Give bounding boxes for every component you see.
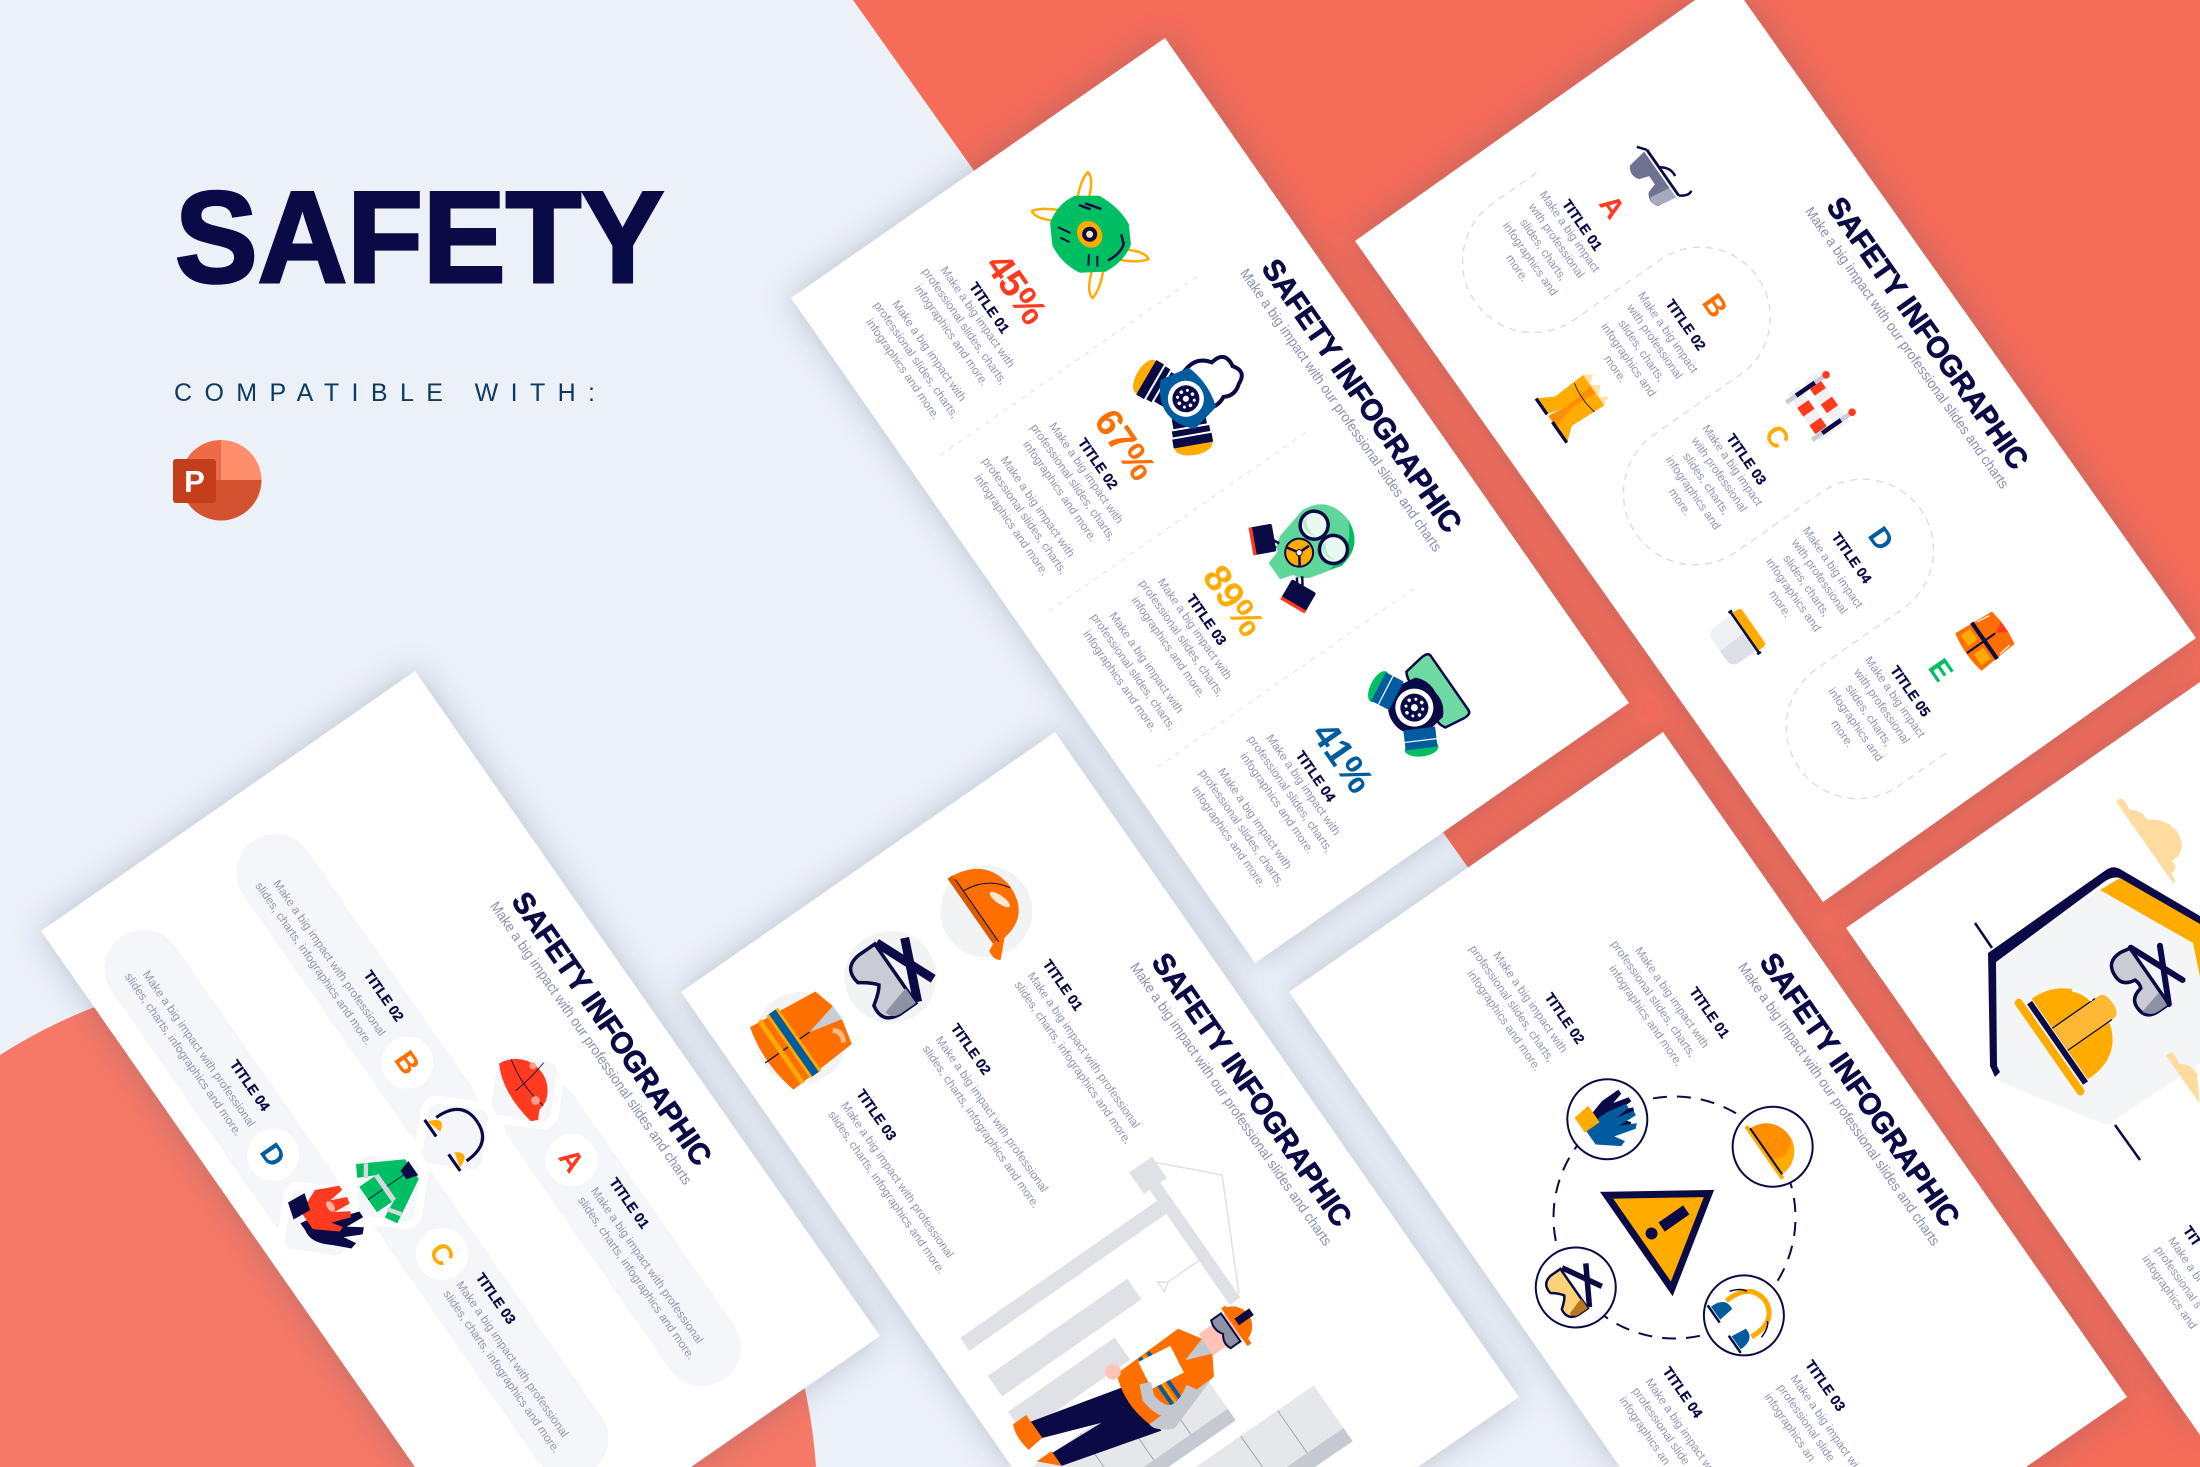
text block: title 01: infographics and more. bbox=[912, 282, 992, 389]
text block: title 01: professional slides, charts, bbox=[871, 299, 962, 421]
illustration: crane and buildings bbox=[935, 1130, 1353, 1467]
text block: title 05: slides, charts, bbox=[1843, 682, 1895, 749]
text block: title 03: slides, charts, infographics and more. bbox=[440, 1287, 564, 1456]
step D badge: D bbox=[253, 1138, 291, 1173]
text block: title 04: TITLE 04 bbox=[227, 1057, 274, 1114]
hexagon roof: amber band bbox=[2100, 878, 2200, 977]
text block: title 02: Make a big impact with bbox=[998, 453, 1078, 560]
compatible with label: COMPATIBLE WITH: bbox=[174, 379, 595, 407]
stat: 41%: 41% bbox=[1303, 715, 1381, 801]
text block: title 03: professional slides, charts, bbox=[1088, 611, 1179, 733]
illustration: construction worker bbox=[1013, 1281, 1281, 1466]
text block: title 01: infographics and more. bbox=[1606, 962, 1686, 1069]
text block: title 03: infographics and more. bbox=[1129, 594, 1209, 700]
text block: title 02: Make a big impact with bbox=[1046, 420, 1126, 526]
text block: title 02: Make a big impact with professional bbox=[270, 877, 389, 1038]
icon: yellow goggles node bbox=[1520, 1232, 1631, 1343]
icon: blue respirator bbox=[1118, 317, 1270, 472]
pill lanes bbox=[89, 819, 756, 1467]
step B badge: B bbox=[387, 1045, 426, 1081]
text block: title 04 bbox=[1616, 1364, 1716, 1467]
icon: safety glasses bbox=[1621, 136, 1692, 214]
text block: title 03: infographics an bbox=[1761, 1390, 1819, 1464]
step C badge: C bbox=[422, 1237, 460, 1272]
letter: D: D bbox=[1861, 521, 1899, 557]
coral background shape: top right bbox=[853, 0, 2200, 1467]
text block: title 02: slides, charts, infographics and more. bbox=[252, 879, 376, 1048]
cloud: lower bbox=[2166, 1047, 2200, 1104]
text block: title 02: professional slides, charts, bbox=[1467, 942, 1557, 1064]
icon: face shield bbox=[1705, 605, 1768, 671]
icon: half-face respirator with visor bbox=[1355, 640, 1480, 772]
text block: title 03: infographics and more. bbox=[1080, 628, 1160, 734]
stat: 89%: 89% bbox=[1194, 558, 1272, 644]
text block: title 01: infographics and bbox=[1500, 219, 1561, 298]
text block: title 01: slides, charts, infographics and more. bbox=[1012, 978, 1135, 1147]
text block: title 03: infographics and bbox=[1663, 453, 1724, 532]
slide subheading: Make a big impact with our professional slides and charts bbox=[1126, 960, 1334, 1249]
slide heading: SAFETY INFOGRAPHIC bbox=[505, 886, 718, 1172]
text block: title 03: Make a big impact with bbox=[1107, 609, 1187, 716]
slide heading: SAFETY INFOGRAPHIC bbox=[1145, 947, 1358, 1233]
icon: orange hard hat in circle bbox=[920, 845, 1051, 977]
hexagon backdrop bbox=[1994, 890, 2200, 1125]
icon: road barrier bbox=[1783, 368, 1859, 445]
text block: title 01: slides, charts, infographics and more. bbox=[575, 1194, 698, 1362]
stat: 67%: 67% bbox=[1085, 402, 1163, 488]
text block: title 02: TITLE 02 bbox=[1075, 435, 1122, 492]
cloud: upper bbox=[2116, 782, 2200, 884]
text block: title 03: professional slides, charts, bbox=[1136, 577, 1227, 699]
text block: title 03: Make a big impact with professional bbox=[838, 1099, 957, 1260]
text block: title 02: more. bbox=[1601, 352, 1630, 385]
dashed serpentine path bbox=[1434, 103, 2043, 827]
text block: partially visible title: infographics and bbox=[2139, 1253, 2200, 1332]
text block: title 05: Make a big impact bbox=[1862, 654, 1929, 741]
icon: work gloves bbox=[284, 1172, 374, 1266]
panel: serpentine steps slide bbox=[1355, 0, 2196, 902]
text block: title 02: professional slides, charts, bbox=[1028, 421, 1119, 543]
text block: title 03: TITLE 03 bbox=[1183, 591, 1230, 648]
icon: red hard hat bbox=[491, 1043, 569, 1125]
icon: green gas mask bbox=[1236, 478, 1378, 620]
text block: title 03: Make a big impact with professional bbox=[454, 1278, 572, 1440]
text block: title 02 bbox=[1582, 278, 1718, 413]
coral background circle: bottom left bbox=[0, 971, 816, 1467]
stat: 45%: 45% bbox=[977, 246, 1055, 333]
text block: title 05: TITLE 05 bbox=[1887, 663, 1934, 720]
text block: title 03 bbox=[1647, 413, 1779, 546]
text block: title 02: professional slides, charts, bbox=[979, 455, 1070, 577]
text block: title 02: infographics and more. bbox=[1464, 967, 1544, 1074]
slide heading: SAFETY INFOGRAPHIC bbox=[1820, 191, 2034, 476]
text block: title 03: TITLE 03 bbox=[1723, 431, 1770, 488]
main title: SAFETY bbox=[175, 164, 664, 310]
text block: title 05 bbox=[1810, 644, 1943, 777]
text block: title 02 bbox=[1453, 922, 1588, 1075]
text block: title 04: infographics and bbox=[1763, 555, 1824, 634]
text block: title 04: professional slides, charts, bbox=[1197, 767, 1287, 889]
icon: blue ear muffs node bbox=[1688, 1260, 1800, 1371]
text block: title 05: with professional bbox=[1851, 665, 1913, 746]
text block: title 01: Make a big impact with bbox=[1632, 944, 1712, 1051]
text block: title 02: TITLE 02 bbox=[361, 967, 407, 1024]
text block: title 04: Make a big impact bbox=[1800, 524, 1866, 611]
letter: A: A bbox=[1592, 189, 1631, 225]
text block: title 01: with professional bbox=[1525, 200, 1588, 281]
icon: amber hard hat bbox=[2019, 959, 2144, 1091]
text block: title 01: infographics and more. bbox=[863, 316, 943, 422]
text block: title 04: slides, charts, infographics and more. bbox=[122, 970, 245, 1138]
icon tiles bbox=[251, 1015, 593, 1299]
icon: green jacket bbox=[347, 1138, 434, 1229]
text block: title 01: Make a big impact with professional bbox=[588, 1185, 706, 1346]
step A badge: A bbox=[552, 1143, 590, 1179]
text block: title 05: infographics and bbox=[1825, 685, 1886, 764]
icon: ear muffs bbox=[425, 1096, 495, 1171]
text block: title 01: professional slides, charts, bbox=[919, 265, 1010, 387]
slide subheading: Make a big impact with our professional slides and charts bbox=[1236, 266, 1444, 555]
text block: title 01: more. bbox=[1503, 252, 1532, 284]
text block: title 02: infographics and more. bbox=[1020, 438, 1100, 544]
text block: title 01: slides, charts, bbox=[1517, 216, 1570, 283]
text block: title 02: with professional bbox=[1624, 301, 1686, 381]
text block: title 02: Make a big impact with bbox=[1491, 949, 1571, 1055]
text block: title 01 bbox=[1484, 179, 1616, 312]
text block: title 03 bbox=[1075, 559, 1254, 742]
text block: title 04: slides, charts, bbox=[1780, 552, 1833, 619]
text block: title 01: Make a big impact with bbox=[938, 264, 1018, 370]
text block: title 01: Make a big impact with bbox=[889, 297, 969, 404]
text block: title 02 bbox=[966, 403, 1145, 586]
text block: title 01: Make a big impact bbox=[1537, 188, 1603, 275]
text block: title 03: professional slide bbox=[1775, 1381, 1838, 1464]
icon: hard hat node bbox=[1717, 1091, 1828, 1202]
text block: title 02: slides, charts, infographics and more. bbox=[920, 1042, 1043, 1211]
panel: hexagon slide (cropped at right edge) bbox=[1846, 682, 2200, 1435]
text block: title 05: more. bbox=[1828, 717, 1857, 750]
text block: title 03: with professional bbox=[1688, 433, 1750, 514]
text block: title 01: TITLE 01 bbox=[1559, 196, 1606, 254]
text block: title 04: TITLE 04 bbox=[1660, 1364, 1706, 1421]
icon: PowerPoint logo: P bbox=[184, 464, 205, 499]
panel: circular cycle slide bbox=[1289, 732, 2127, 1467]
icon: orange vest with pockets bbox=[1953, 608, 2018, 672]
letter: C: C bbox=[1757, 419, 1796, 455]
text block: title 02: Make a big impact with professional bbox=[933, 1033, 1051, 1195]
text block: title 01 bbox=[858, 247, 1036, 430]
text block: title 02: infographics and more. bbox=[972, 472, 1052, 578]
text block: title 03 bbox=[1761, 1357, 1862, 1467]
letter: B: B bbox=[1695, 288, 1734, 324]
text block: title 04: more. bbox=[1766, 587, 1795, 620]
text block: title 01: Make a big impact with professional bbox=[1025, 969, 1143, 1131]
text block: title 02: infographics and bbox=[1598, 320, 1659, 399]
text block: title 02: Make a big impact bbox=[1635, 289, 1702, 376]
text block: title 03: slides, charts, bbox=[1680, 450, 1733, 517]
text block: title 04: infographics and more. bbox=[1237, 750, 1317, 856]
step B badge bbox=[371, 1026, 444, 1099]
icon: goggles in circle bbox=[826, 913, 954, 1041]
icon: green dust mask bbox=[1029, 170, 1152, 300]
text block: title 04: TITLE 04 bbox=[1293, 748, 1339, 805]
text block: title 03: Make a big impact bbox=[1700, 422, 1766, 509]
panel: pill lanes slide bbox=[41, 671, 880, 1467]
text block: title 01: TITLE 01 bbox=[1686, 984, 1733, 1041]
text block: title 03: TITLE 03 bbox=[853, 1086, 900, 1143]
text block: title 04: Make a big impact with bbox=[1215, 765, 1295, 872]
hexagon outline bbox=[1988, 867, 2200, 1077]
text block: title 03: Make a big impact with bbox=[1155, 576, 1235, 682]
dashed cycle ring bbox=[1506, 1049, 1843, 1386]
slide subheading: Make a big impact with our professional slides and charts bbox=[1801, 204, 2011, 492]
text block: title 01: TITLE 01 bbox=[606, 1175, 653, 1232]
icon: warning triangle bbox=[1607, 1147, 1742, 1289]
text block: title 04: Make a big impact with bbox=[1264, 732, 1344, 838]
text block: title 04 bbox=[1183, 715, 1362, 898]
slide subheading: Make a big impact with our professional slides and charts bbox=[486, 899, 694, 1188]
letter: E: E bbox=[1921, 653, 1959, 688]
text block: title 04: infographics an bbox=[1616, 1394, 1674, 1467]
text block: title 03: more. bbox=[1666, 485, 1694, 518]
panel: worker illustration slide bbox=[681, 732, 1519, 1467]
icon: PowerPoint logo bbox=[173, 440, 262, 520]
text block: title 02: TITLE 02 bbox=[948, 1020, 994, 1078]
text block: title 04 bbox=[1747, 511, 1884, 648]
text block: title 01: professional slides, charts, bbox=[1608, 938, 1699, 1060]
icon: gloves node bbox=[1552, 1064, 1663, 1175]
panel: percentage masks slide bbox=[791, 38, 1629, 963]
text block: title 04: professional slide bbox=[1629, 1385, 1693, 1467]
text block: title 01 bbox=[1595, 915, 1733, 1071]
text block: title 01: TITLE 01 bbox=[1040, 956, 1086, 1014]
icon: yellow boots bbox=[1536, 364, 1616, 443]
text block: title 03: TITLE 03 bbox=[1802, 1357, 1849, 1414]
text block: title 04: infographics and more. bbox=[1189, 784, 1269, 890]
text block: title 02: slides, charts, bbox=[1615, 317, 1668, 384]
text block: title 02 bbox=[252, 856, 408, 1048]
text block: title 04: professional slides, charts, bbox=[1245, 733, 1336, 855]
slide heading: SAFETY INFOGRAPHIC bbox=[1255, 253, 1468, 539]
text block: title 04: Make a big impact with professional bbox=[140, 968, 258, 1129]
text block: title 01: TITLE 01 bbox=[966, 279, 1013, 336]
text block: title 04: TITLE 04 bbox=[1829, 529, 1875, 586]
icon: goggles bbox=[2106, 932, 2190, 1020]
text block: title 03: slides, charts, infographics and more. bbox=[825, 1108, 948, 1277]
slide heading: SAFETY INFOGRAPHIC bbox=[1753, 947, 1966, 1233]
slide subheading: Make a big impact with our professional slides and charts bbox=[1734, 960, 1942, 1249]
step A badge bbox=[535, 1124, 608, 1196]
step D badge bbox=[237, 1119, 309, 1191]
text block: title 02: TITLE 02 bbox=[1542, 990, 1588, 1047]
text block: title 04: with professional bbox=[1788, 535, 1851, 616]
step C badge bbox=[406, 1218, 478, 1290]
icon: orange safety vest in circle bbox=[737, 974, 865, 1102]
text block: title 03: TITLE 03 bbox=[473, 1270, 519, 1327]
text block: title 02: TITLE 02 bbox=[1663, 296, 1709, 353]
